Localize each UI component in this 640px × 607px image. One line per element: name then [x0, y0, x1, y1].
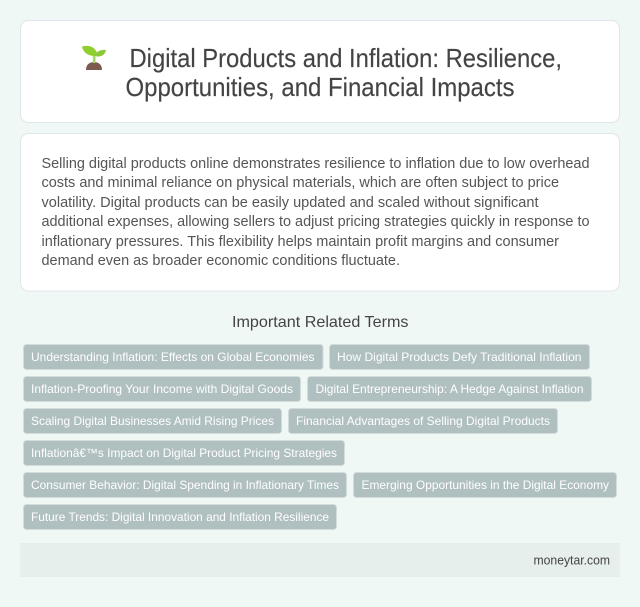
chip: scaling digital businesses [24, 408, 282, 434]
heading: related terms: Important Related Terms [232, 314, 408, 331]
chip: financial advantages [288, 408, 558, 434]
chip: inflation-proofing income: Inflation-Proofing Your Income with Digital Goods [31, 382, 293, 396]
chip: defy traditional inflation: How Digital Products Defy Traditional Inflation [337, 350, 582, 364]
icon: sprout [82, 46, 106, 70]
title [126, 45, 562, 102]
text block: description: Selling digital products online demonstrates resilience to inflation due to low overhead [42, 156, 590, 172]
text block: description: volatility. Digital products can be easily updated and scaled without significant [42, 195, 538, 211]
footer [20, 543, 620, 577]
chip: consumer behavior: Consumer Behavior: Digital Spending in Inflationary Times [31, 478, 339, 492]
chip: inflation-proofing income [24, 376, 300, 402]
chip: pricing strategies: Inflationâ€™s Impact on Digital Product Pricing Strategies [31, 446, 337, 460]
panel: description card [20, 134, 620, 291]
chip: financial advantages: Financial Advantages of Selling Digital Products [296, 414, 550, 428]
chip: understanding inflation: Understanding Inflation: Effects on Global Economies [31, 350, 314, 364]
panel: related term chips [24, 344, 616, 530]
panel: title card [20, 20, 620, 122]
chip: future trends: Future Trends: Digital Innovation and Inflation Resilience [31, 510, 329, 524]
chip: consumer behavior [24, 472, 346, 498]
chip: scaling digital businesses: Scaling Digital Businesses Amid Rising Prices [31, 414, 274, 428]
chip: emerging opportunities: Emerging Opportunities in the Digital Economy [362, 478, 609, 492]
text block: description [42, 156, 590, 269]
footer text: site name: moneytar.com [534, 552, 610, 568]
chip: digital entrepreneurship [308, 376, 592, 402]
chip: future trends [24, 504, 336, 530]
text block: description: demand even as broader economic conditions fluctuate. [42, 253, 400, 269]
chip: digital entrepreneurship: Digital Entrepreneurship: A Hedge Against Inflation [316, 382, 584, 396]
chip: understanding inflation [24, 344, 323, 370]
text block: description: costs and minimal reliance on physical materials, which are often subject to price [42, 175, 559, 191]
chip: pricing strategies [24, 440, 344, 466]
chip: emerging opportunities [354, 472, 616, 498]
text block: description: additional expenses, allowing sellers to adjust pricing strategies quickly in response to [42, 214, 590, 230]
chip: defy traditional inflation [330, 344, 590, 370]
title: Opportunities, and Financial Impacts [126, 74, 514, 102]
text block: description: inflationary pressures. This flexibility helps maintain profit margins and consumer [42, 234, 559, 250]
title: Digital Products and Inflation: Resilience, [130, 45, 562, 73]
